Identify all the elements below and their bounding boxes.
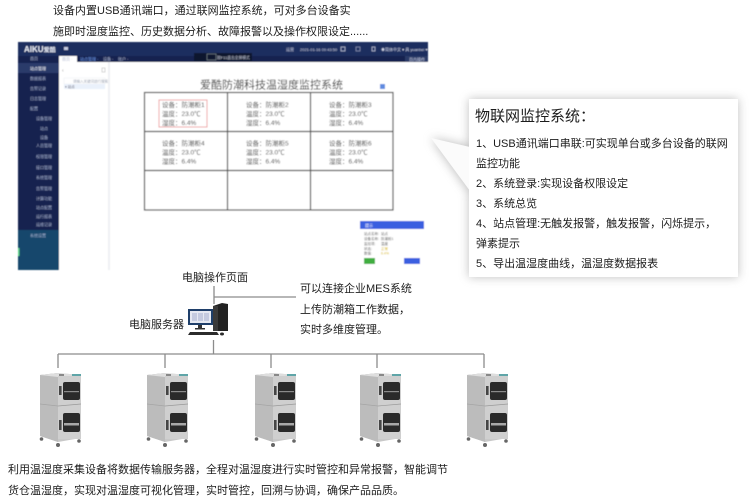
callout panel: [431, 99, 738, 277]
device table: 设备：防潮柜4: [162, 138, 205, 148]
drying cabinets: [40, 373, 508, 447]
cabinet 3: [255, 373, 296, 447]
sidebar: 站点管理: [30, 65, 46, 71]
top navigation bar: 2021-01-16 09:43:50: [300, 47, 338, 52]
bottom description: [8, 464, 448, 496]
alert popup: 监控项:: [364, 241, 375, 246]
cabinet 4: [360, 373, 401, 447]
chart title: 爱酷防潮科技温湿度监控系统: [200, 78, 343, 92]
MES description: 实时多维度管理。: [300, 324, 388, 336]
sidebar: [18, 55, 59, 270]
sidebar: 系统管理: [36, 174, 52, 180]
callout list: 3、系统总览: [476, 198, 537, 210]
sidebar: 计算功能: [36, 195, 52, 201]
top navigation bar: 首页 ·: [62, 56, 72, 62]
top navigation bar: 站点管理 ·: [80, 56, 98, 62]
callout list: 1、USB通讯端口串联:可实现单台或多台设备的联网: [476, 138, 728, 150]
device table: 湿度：6.4%: [162, 156, 197, 166]
network connector lines: [58, 286, 484, 368]
MES description: 上传防潮箱工作数据，: [300, 304, 410, 316]
sidebar: 权限管理: [36, 153, 52, 159]
sidebar: 运行报表: [36, 213, 52, 219]
sidebar: 日志管理: [30, 95, 46, 101]
top navigation bar: 运营: [286, 46, 294, 52]
alarm highlight: [159, 100, 207, 127]
callout list: 5、导出温湿度曲线，温湿度数据报表: [476, 258, 658, 270]
cabinet 5: [467, 373, 508, 447]
bottom description: 利用温湿度采集设备将数据传输服务器，全程对温湿度进行实时管控和异常报警，智能调节: [8, 464, 448, 476]
intro text: 设备内置USB通讯端口，通过联网监控系统，可对多台设备实: [53, 5, 351, 17]
intro text: [53, 4, 368, 38]
intro text: 施即时湿度监控、历史数据分析、故障报警以及操作权限设定......: [53, 26, 368, 38]
sidebar: 站点配置: [36, 204, 52, 210]
station tree panel: ‹: [62, 68, 64, 74]
top navigation bar: 账户 ·: [118, 56, 128, 62]
status indicator: [380, 84, 385, 89]
callout heading: 物联网监控系统：: [475, 108, 595, 125]
device table: 温度：23.0℃: [246, 148, 285, 156]
sidebar: 运维记录: [36, 221, 52, 227]
callout list: 监控功能: [476, 158, 520, 170]
sidebar: 数据报表: [30, 75, 46, 81]
cabinet 1: [40, 373, 81, 447]
alert popup: 温度: [381, 241, 388, 246]
top navigation bar: 页内操作: [409, 56, 425, 62]
top navigation bar: ◉简体中文 ▾ 具 yuanbei ▾: [381, 46, 427, 52]
MES description: [300, 282, 412, 336]
sidebar: 设备: [40, 134, 48, 140]
top navigation bar: [18, 42, 428, 62]
sidebar: 系统设置: [30, 232, 46, 238]
device table: 设备：防潮柜2: [246, 100, 289, 109]
top navigation bar: 设备 ·: [103, 56, 113, 62]
label: computer server: 电脑服务器: [129, 319, 184, 331]
device table: 设备：防潮柜1: [162, 100, 205, 109]
alert popup: [360, 221, 424, 265]
bottom description: 货仓温湿度，实现对温湿度可视化管理，实时管控，回溯与协调，确保产品品质。: [8, 484, 404, 496]
alert popup: 6.4%: [381, 252, 389, 256]
device table: 设备：防潮柜3: [329, 100, 372, 109]
alert popup: 防潮柜1: [381, 236, 393, 241]
alert popup: 数值:: [364, 250, 372, 256]
device table: 湿度：6.4%: [246, 118, 281, 127]
callout text: [475, 108, 728, 270]
alert popup: 状态:: [364, 246, 372, 251]
sidebar: 配置: [30, 105, 38, 111]
sidebar: 首页: [30, 55, 38, 61]
device table: 湿度：6.4%: [162, 118, 197, 127]
device table: 温度：23.0℃: [162, 148, 201, 156]
device table: 湿度：6.4%: [329, 156, 364, 166]
device table: 设备：防潮柜6: [329, 138, 372, 148]
station tree panel: 请输入关键词进行搜索: [73, 78, 108, 84]
alert popup: 站点: [381, 231, 388, 236]
device table: 温度：23.0℃: [246, 109, 285, 118]
alert popup: 站点名称:: [364, 231, 379, 236]
sidebar: 站点: [40, 125, 48, 131]
alert popup: 设备名称:: [364, 236, 379, 241]
alert popup: 正常: [381, 246, 388, 251]
sidebar: 告警记录: [30, 85, 46, 91]
MES description: 可以连接企业MES系统: [300, 283, 412, 295]
callout list: 弹素提示: [476, 238, 520, 250]
label: computer operation page: 电脑操作页面: [182, 272, 248, 284]
station tree panel: ▾ 站点: [65, 84, 75, 89]
panel shadow: [431, 99, 738, 277]
device table: 湿度：6.4%: [329, 118, 364, 127]
sidebar: 人员管理: [36, 142, 52, 148]
top navigation bar: 按F11退出全屏模式: [217, 55, 250, 60]
device table: [144, 92, 393, 210]
monitoring screenshot: [18, 42, 428, 270]
device table: 温度：23.0℃: [329, 109, 368, 118]
device table: 温度：23.0℃: [329, 148, 368, 156]
device table: 湿度：6.4%: [246, 156, 281, 166]
icon: computer server: [188, 303, 228, 336]
station tree panel: [60, 62, 110, 270]
callout list: 4、站点管理:无触发报警，触发报警，闪烁提示，: [476, 218, 716, 230]
device table: 温度：23.0℃: [162, 109, 201, 118]
sidebar: 设备管理: [36, 115, 52, 121]
callout list: [476, 138, 728, 270]
top navigation bar: AIKU爱酷: [24, 45, 56, 54]
cabinet 2: [147, 373, 188, 447]
sidebar: 告警管理: [36, 185, 52, 191]
sidebar: 接口管理: [36, 164, 52, 170]
callout list: 2、系统登录:实现设备权限设定: [476, 178, 628, 190]
device table: 设备：防潮柜5: [246, 138, 289, 148]
alert popup: 提示: [365, 222, 373, 228]
